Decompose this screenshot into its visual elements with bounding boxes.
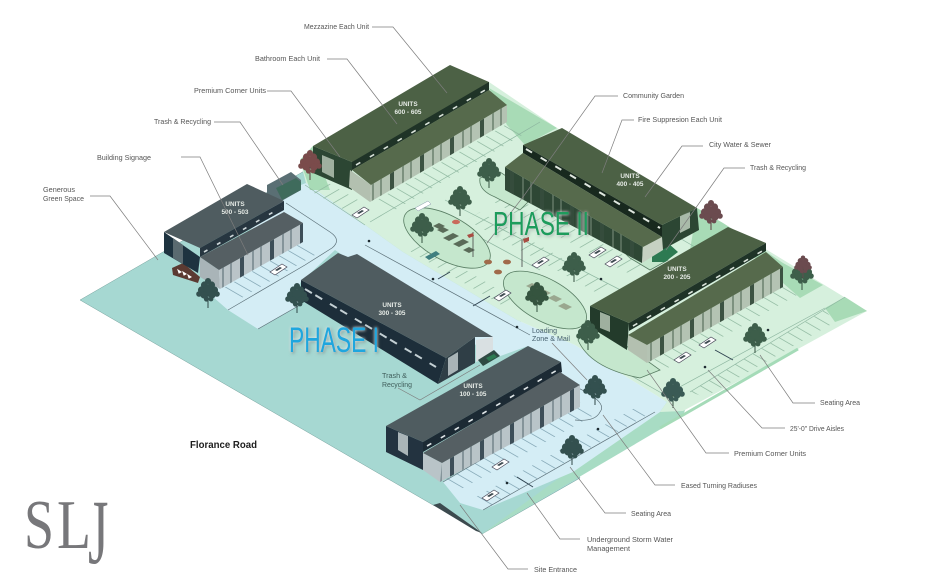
community garden details — [415, 201, 572, 310]
logo: SLJ: J — [88, 482, 108, 584]
building: units 100-105 — [386, 346, 580, 482]
callout labels: Loading — [532, 326, 557, 335]
callout labels: Recycling — [382, 380, 412, 389]
callout labels: Seating Area — [631, 509, 672, 518]
ground: lower edge strip — [482, 395, 690, 534]
seating: building 500 patio — [172, 263, 200, 283]
callout labels: Building Signage — [97, 153, 151, 162]
logo: SLJ — [24, 482, 108, 584]
callout labels: Fire Suppresion Each Unit — [638, 115, 722, 124]
callout labels: Trash & Recycling — [154, 117, 211, 126]
ground: phase II site — [300, 82, 867, 412]
callout labels: Green Space — [43, 194, 84, 203]
site entrance ramp — [433, 503, 482, 533]
callout labels: Eased Turning Radiuses — [681, 481, 757, 490]
callout labels: Management — [587, 544, 630, 553]
ground: phase I green space — [80, 170, 580, 534]
unit labels: 600 - 605 — [394, 109, 422, 116]
unit labels: 500 - 503 — [221, 209, 249, 216]
building: units 200-205 — [590, 227, 783, 363]
parking and drive aisle markings — [222, 122, 845, 510]
unit labels: UNITS — [620, 173, 640, 180]
unit labels: 300 - 305 — [378, 310, 406, 317]
callout labels: Generous — [43, 185, 75, 194]
dumpster: left trash enclosure — [267, 172, 301, 203]
logo: SLJ: L — [57, 487, 91, 564]
building: units 400-405 — [505, 128, 699, 263]
unit labels: UNITS — [225, 201, 245, 208]
building: units 600-605 — [313, 65, 507, 202]
road name: Florance Road — [190, 440, 257, 451]
logo: SLJ: S — [24, 487, 54, 564]
unit labels: 400 - 405 — [616, 181, 644, 188]
callout labels: Seating Area — [820, 398, 861, 407]
trash enclosure: phase I — [476, 337, 500, 366]
callout labels: Mezzazine Each Unit — [304, 22, 369, 31]
callout labels: Premium Corner Units — [194, 86, 266, 95]
islands and curbs — [394, 172, 668, 378]
unit labels — [221, 101, 691, 398]
cars — [270, 207, 716, 501]
callout labels: 25'-0" Drive Aisles — [790, 424, 844, 433]
unit labels: UNITS — [382, 302, 402, 309]
callout labels: Underground Storm Water — [587, 535, 674, 544]
callout labels: Bathroom Each Unit — [255, 54, 320, 63]
callout labels: City Water & Sewer — [709, 140, 772, 149]
unit labels: UNITS — [398, 101, 418, 108]
callout labels: Community Garden — [623, 91, 684, 100]
unit labels: 200 - 205 — [663, 274, 691, 281]
callout labels: Premium Corner Units — [734, 449, 806, 458]
callout labels: Site Entrance — [534, 565, 577, 574]
trees — [196, 150, 814, 465]
unit labels: UNITS — [463, 383, 483, 390]
callout labels: Trash & — [382, 371, 407, 380]
building: units 300-305 — [301, 253, 493, 384]
back green strips — [300, 88, 867, 322]
ground: phase I roads and parking — [205, 183, 667, 510]
callout labels: Trash & Recycling — [750, 163, 806, 172]
callout labels: Zone & Mail — [532, 334, 570, 343]
phase I label: PHASE I — [289, 321, 379, 360]
unit labels: 100 - 105 — [459, 391, 487, 398]
phase II label: PHASE II — [493, 205, 589, 242]
building: units 500-503 — [164, 184, 303, 289]
unit labels: UNITS — [667, 266, 687, 273]
dumpster: phase II — [652, 243, 678, 262]
leader lines — [90, 27, 815, 569]
bottom edge band — [660, 349, 798, 428]
